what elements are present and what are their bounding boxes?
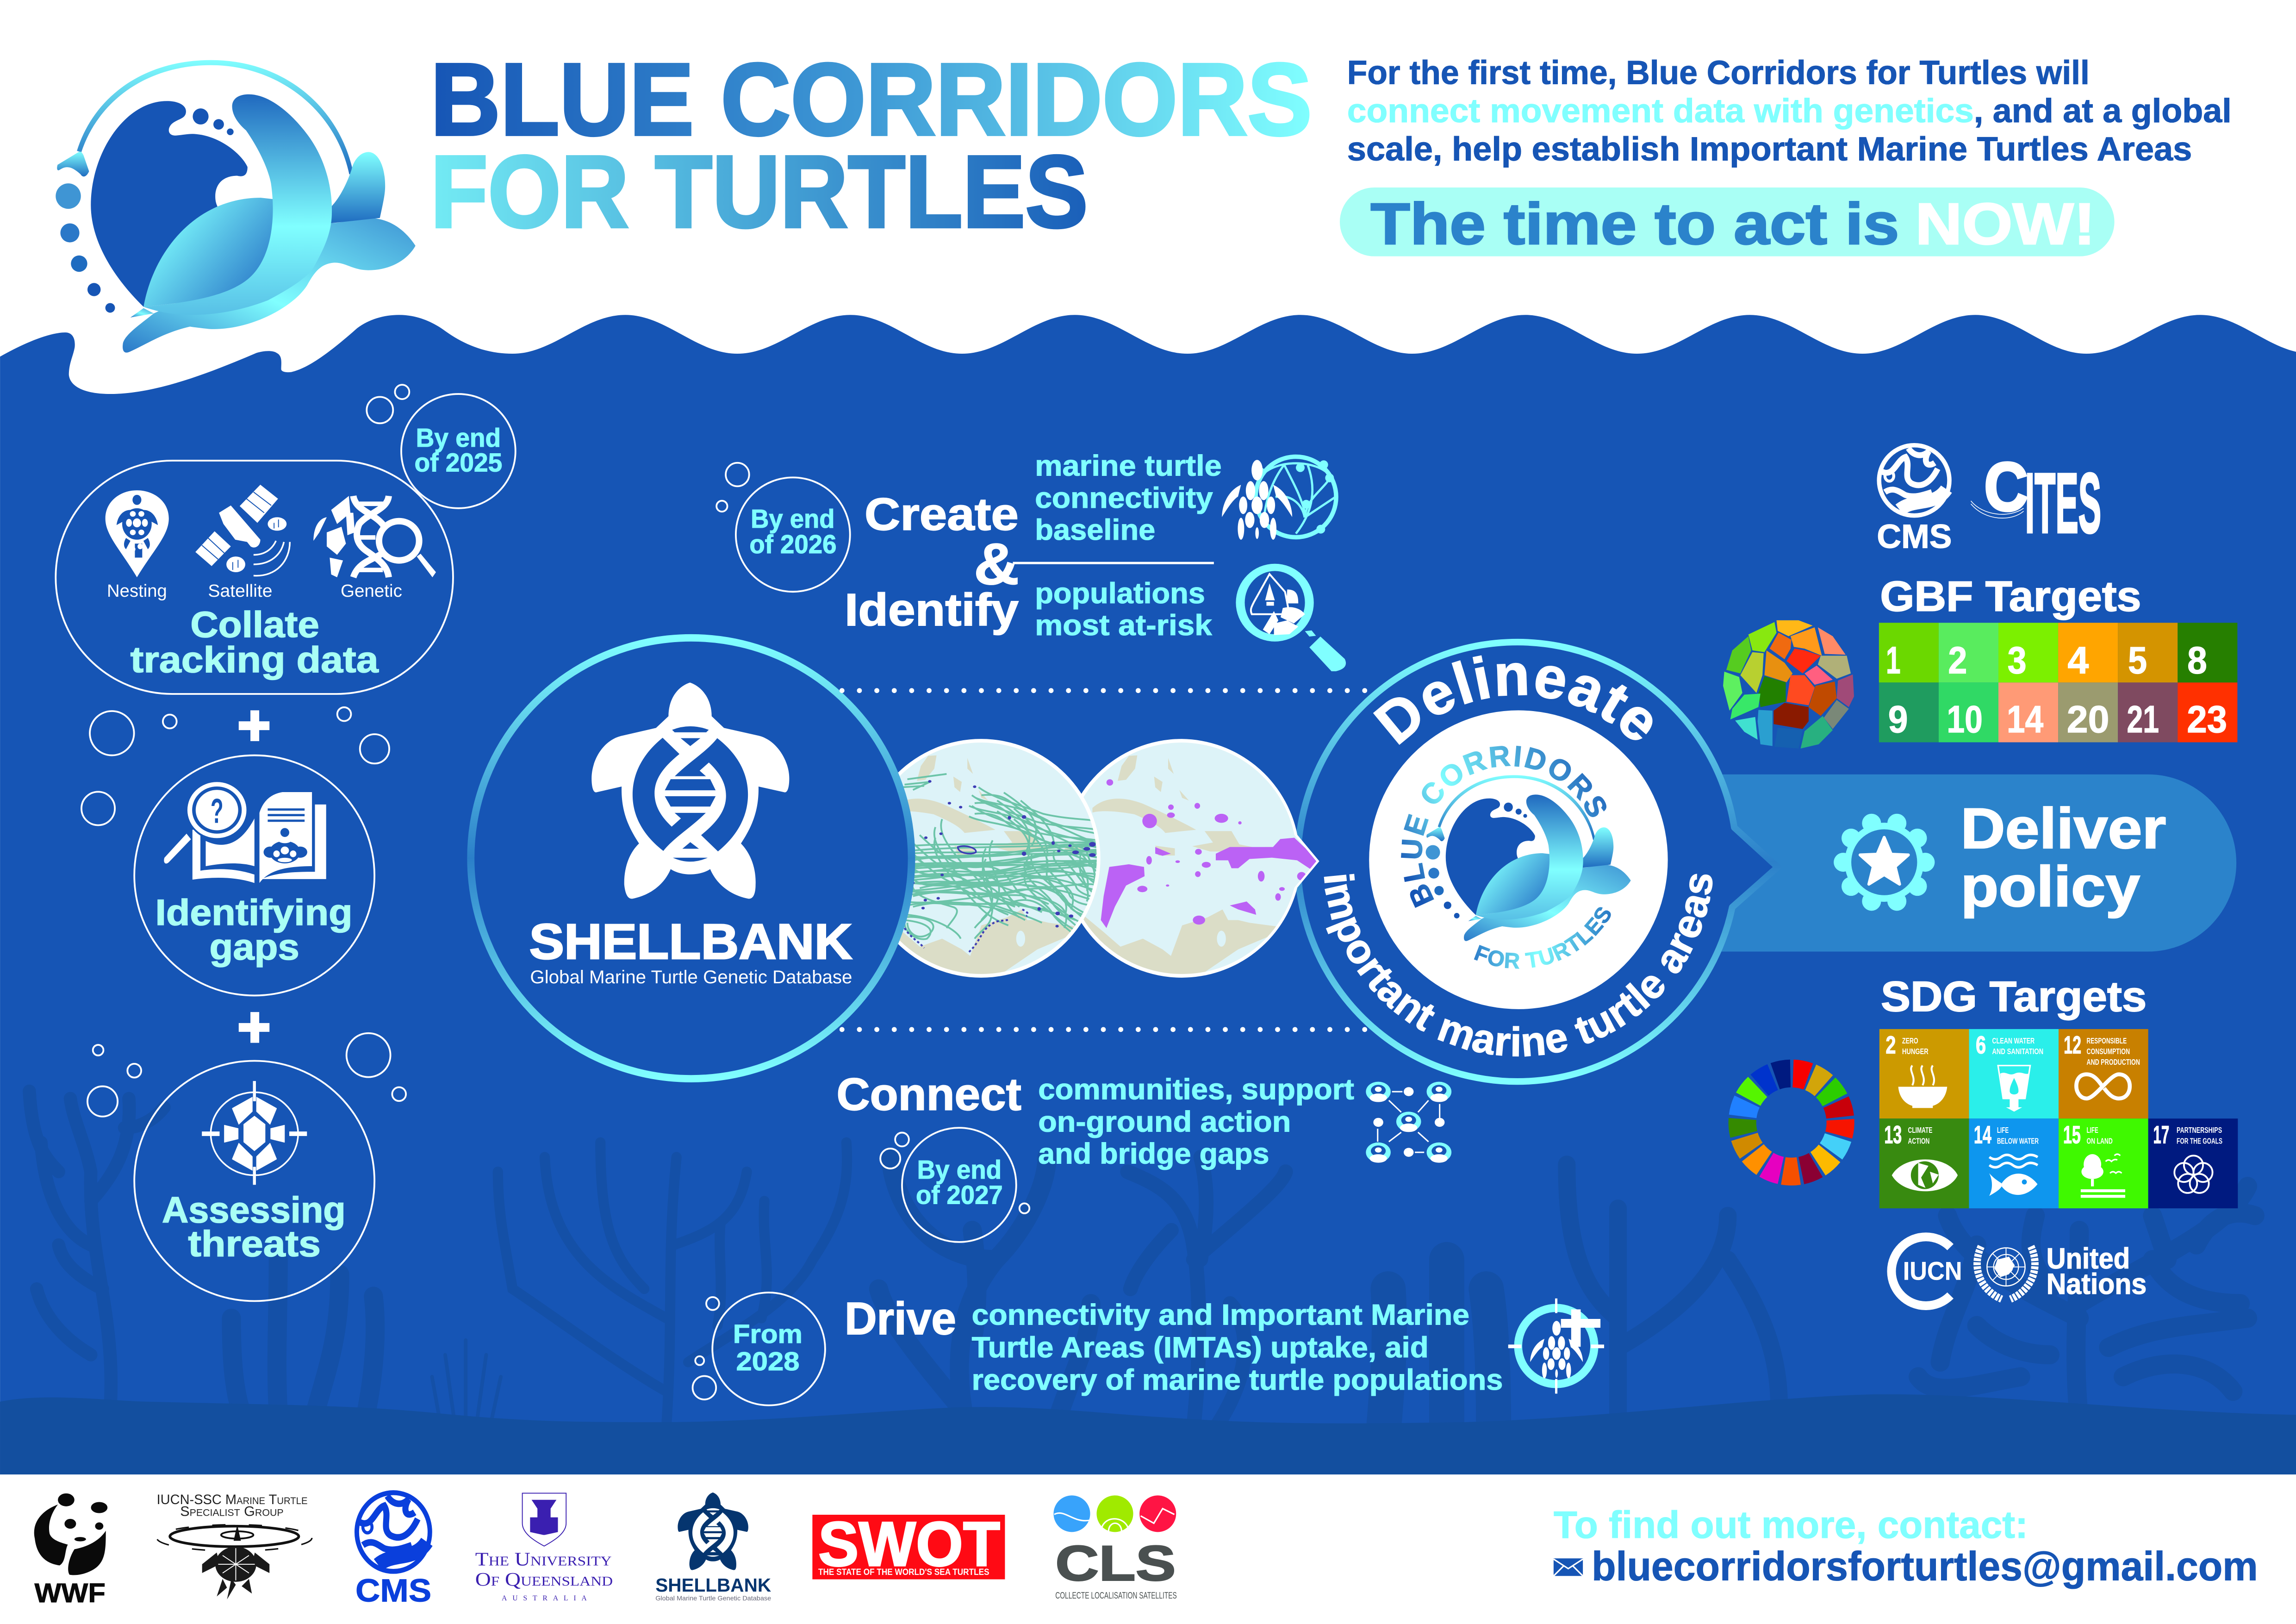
identify description: most at-risk (1035, 609, 1213, 642)
map: important areas (1081, 739, 1319, 978)
icon: target shell (202, 1081, 307, 1185)
icon: partnership flower (2174, 1156, 2213, 1193)
GBF target grid: 2 (1948, 640, 1967, 682)
header intro text (1347, 54, 2232, 168)
SDG target grid: 15 (2063, 1121, 2081, 1149)
icon: fish and waves (1989, 1155, 2038, 1196)
icon: turtle and globe (1222, 456, 1336, 540)
map: tracking data (898, 739, 1101, 978)
delineate ring with arrow (1298, 642, 1778, 1081)
panel: identifying gaps: gaps (210, 926, 299, 967)
icon: satellite (195, 485, 290, 576)
GBF target grid: 9 (1888, 699, 1908, 741)
SDG target grid: ZERO (1902, 1036, 1918, 1045)
header: logo turtle (56, 60, 416, 353)
icon: magnifier warning (1236, 564, 1346, 671)
icon: book and magnifier: ? (211, 792, 224, 831)
icon: eye (1892, 1159, 1958, 1191)
footer logo: Shellbank: SHELLBANK (655, 1574, 771, 1596)
footer logo: CLS: COLLECTE LOCALISATION SATELLITES (1055, 1590, 1177, 1601)
connect description (1038, 1073, 1354, 1170)
SDG target grid: LIFE (1997, 1125, 2009, 1135)
footer logo: Shellbank (655, 1493, 771, 1602)
footer logo: IUCN-SSC Marine Turtle Specialist Group: IUCN-SSC Marine Turtle (157, 1492, 307, 1507)
footer logo: CMS (355, 1493, 431, 1609)
SDG target grid: CLEAN WATER (1992, 1036, 2035, 1045)
connect description: and bridge gaps (1038, 1138, 1269, 1170)
panel: collate tracking data (56, 461, 453, 694)
GBF target grid: 21 (2127, 699, 2159, 741)
footer logo: CLS: CLS (1055, 1536, 1176, 1591)
label nesting: Nesting (107, 581, 167, 601)
create description (1035, 450, 1222, 546)
heading: GBF targets: GBF Targets (1880, 573, 2141, 620)
shellbank name: SHELLBANK (529, 914, 852, 969)
contact heading: To find out more, contact: (1554, 1504, 2028, 1546)
deliver policy banner (1684, 775, 2236, 952)
SDG target grid: PARTNERSHIPS (2177, 1125, 2222, 1135)
heading identifying gaps: Identifying (155, 892, 353, 933)
SDG target grid: ACTION (1908, 1136, 1929, 1145)
logo: IUCN: IUCN (1903, 1257, 1962, 1286)
icon: envelope (1554, 1558, 1583, 1576)
logo: United Nations (1977, 1243, 2147, 1300)
timeline badge: by end of 2027: of 2027 (916, 1180, 1003, 1210)
call to action pill: NOW! (1915, 191, 2095, 256)
delineate curved heading: Delineate (1363, 641, 1674, 756)
ocean panel with wave (0, 315, 2296, 1474)
text: ITES (2025, 456, 2101, 550)
create and identify block: & (974, 531, 1019, 597)
GBF target grid: 4 (2067, 640, 2089, 682)
footer logo: WWF (34, 1493, 107, 1608)
shellbank panel (471, 638, 912, 1079)
connect block: Connect (837, 1069, 1021, 1120)
footer logo: SWOT: THE STATE OF THE WORLD'S SEA TURTLES (818, 1568, 989, 1577)
badge: blue corridors logo in white circle: FOR TURTLES (1471, 902, 1618, 974)
logo: CMS (1877, 445, 1952, 555)
logo: United Nations: Nations (2047, 1268, 2147, 1300)
logo: IUCN (1892, 1237, 1962, 1306)
header intro text: connect movement data with genetics (1347, 92, 1974, 130)
timeline badge: by end of 2027: By end (917, 1155, 1002, 1185)
contact email: bluecorridorsforturtles@gmail.com (1592, 1543, 2258, 1589)
plus (239, 1012, 269, 1043)
plus (239, 710, 269, 741)
create and identify block: Create (865, 488, 1019, 539)
deliver policy banner: Deliver (1960, 797, 2166, 861)
footer logo: WWF: WWF (34, 1578, 106, 1608)
icon: community network (1366, 1082, 1451, 1163)
identify description (1035, 577, 1213, 642)
SDG target grid: 12 (2064, 1031, 2081, 1059)
create and identify block: Identify (845, 584, 1019, 635)
SDG target grid: FOR THE GOALS (2177, 1136, 2222, 1145)
footer logo: University of Queensland: AUSTRALIA (502, 1594, 587, 1602)
SDG target grid: 6 (1976, 1031, 1986, 1059)
logo: CMS: CMS (1877, 518, 1952, 555)
footer logo: IUCN-SSC Marine Turtle Specialist Group: Specialist Group (180, 1504, 284, 1519)
icon: genetic turtle and dna (313, 496, 436, 577)
icon: tree and birds (2081, 1154, 2125, 1198)
call to action pill (1340, 187, 2115, 256)
timeline badge: from 2028 (712, 1293, 825, 1405)
footer logo: SWOT: SWOT (818, 1509, 1000, 1579)
header intro text: , and at a global (1974, 92, 2232, 130)
timeline badge: by end of 2026: of 2026 (749, 530, 837, 559)
connect block (837, 1069, 1354, 1170)
title: BLUE CORRIDORS (430, 42, 1312, 156)
panel: identifying gaps (134, 756, 374, 995)
SDG target grid: 17 (2153, 1121, 2169, 1149)
header intro text: For the first time, Blue Corridors for Turtles will (1347, 54, 2090, 92)
deliver policy banner: policy (1960, 855, 2140, 918)
SDG target grid: AND PRODUCTION (2086, 1057, 2140, 1067)
timeline badge: from 2028: From (733, 1319, 803, 1349)
badge: blue corridors logo in white circle (1369, 710, 1668, 1009)
icon: water glass (1998, 1066, 2030, 1112)
SDG target grid: LIFE (2086, 1125, 2098, 1135)
bubbles (81, 385, 1029, 1399)
left timeline badge: by end of 2025: By end (416, 423, 501, 453)
icon: SDG wheel (1722, 1053, 1861, 1192)
panel: assessing threats: threats (188, 1223, 321, 1264)
left timeline badge: by end of 2025: of 2025 (414, 448, 502, 478)
SDG target grid: 2 (1885, 1031, 1896, 1059)
GBF target grid: 10 (1947, 699, 1983, 741)
timeline badge: from 2028: 2028 (736, 1347, 800, 1376)
GBF target grid: 3 (2008, 640, 2027, 682)
SDG target grid: ON LAND (2086, 1136, 2113, 1145)
icon: infinity (2076, 1074, 2130, 1099)
heading assessing threats: Assessing (162, 1189, 346, 1230)
label genetic: Genetic (341, 581, 402, 601)
logo: United Nations: United (2047, 1243, 2130, 1275)
GBF target grid (1879, 623, 2237, 742)
important marine turtle areas curved label: important marine turtle areas (1315, 869, 1722, 1065)
label satellite: Satellite (208, 581, 273, 601)
logo: CITES: C (1984, 448, 2028, 525)
GBF target grid: 14 (2007, 699, 2043, 741)
connect description: communities, support (1038, 1073, 1354, 1106)
GBF target grid: 8 (2187, 640, 2207, 682)
drive description (972, 1299, 1503, 1396)
call to action pill: The time to act is (1370, 191, 1899, 256)
create and identify block (845, 450, 1222, 642)
create description: marine turtle (1035, 450, 1222, 482)
footer logo: University of Queensland (475, 1493, 613, 1602)
SDG target grid: 13 (1884, 1121, 1902, 1149)
panel: assessing threats (134, 1061, 374, 1301)
GBF target grid: 1 (1886, 640, 1901, 682)
title (430, 42, 1312, 249)
SDG target grid: 14 (1974, 1121, 1991, 1149)
icon: bowl (1898, 1066, 1947, 1108)
drive description: Turtle Areas (IMTAs) uptake, aid (972, 1331, 1429, 1364)
connect description: on-ground action (1038, 1106, 1291, 1138)
drive description: connectivity and Important Marine (972, 1299, 1469, 1331)
icon: mosaic turtle shell (1723, 620, 1854, 749)
GBF target grid: 20 (2067, 699, 2109, 741)
SDG target grid: RESPONSIBLE (2086, 1036, 2127, 1045)
SDG target grid: CONSUMPTION (2086, 1047, 2130, 1056)
logo: CITES (1971, 448, 2101, 550)
icon: book and magnifier (164, 780, 326, 883)
footer logo: CLS (1053, 1495, 1177, 1601)
badge: blue corridors logo in white circle: BLUE CORRIDORS (1395, 739, 1615, 912)
header intro text: scale, help establish Important Marine Turtles Areas (1347, 130, 2192, 168)
footer logo: University of Queensland: Of Queensland (475, 1568, 613, 1590)
footer logo: CMS: CMS (355, 1573, 431, 1609)
heading: SDG targets: SDG Targets (1881, 973, 2147, 1020)
SDG target grid: BELOW WATER (1997, 1136, 2039, 1145)
shellbank subtitle: Global Marine Turtle Genetic Database (530, 967, 852, 987)
identify description: populations (1035, 577, 1205, 610)
icon: target turtle plus (1508, 1299, 1604, 1393)
create description: baseline (1035, 514, 1155, 546)
drive block: Drive (845, 1293, 956, 1344)
sea floor band (0, 1394, 2296, 1474)
panel: collate tracking data: tracking data (131, 639, 379, 680)
icon: shellbank turtle (591, 682, 789, 899)
timeline badge: by end of 2027 (902, 1128, 1016, 1242)
left timeline badge: by end of 2025 (401, 394, 516, 508)
coral silhouettes (29, 1091, 2255, 1428)
SDG target grid (1879, 1029, 2238, 1208)
dotted dividers (842, 691, 1365, 1030)
heading collate: Collate (190, 604, 319, 645)
SDG target grid: HUNGER (1902, 1047, 1929, 1056)
drive block (845, 1293, 1503, 1396)
drive description: recovery of marine turtle populations (972, 1364, 1503, 1396)
timeline badge: by end of 2026: By end (751, 504, 834, 534)
timeline badge: by end of 2026 (736, 477, 850, 592)
create description: connectivity (1035, 482, 1213, 514)
icon: star badge (1834, 814, 1935, 911)
title line 2: FOR TURTLES (430, 134, 1088, 249)
footer logo: Shellbank: Global Marine Turtle Genetic Database (655, 1595, 771, 1602)
icon: nesting pin (106, 490, 169, 577)
SDG target grid: AND SANITATION (1992, 1047, 2043, 1056)
GBF target grid: 5 (2128, 640, 2147, 682)
footer logo: IUCN-SSC Marine Turtle Specialist Group (157, 1492, 312, 1599)
footer logo: University of Queensland: The University (475, 1548, 612, 1569)
SDG target grid: CLIMATE (1908, 1125, 1932, 1135)
GBF target grid: 23 (2187, 699, 2227, 741)
